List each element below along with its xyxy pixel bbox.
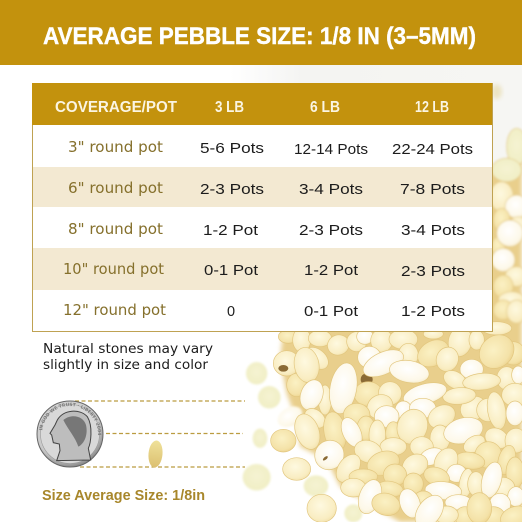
row: 10 inch pot: 10" round pot [63,260,164,278]
table header row: 12 LB [415,99,449,116]
title banner [0,0,522,65]
row: 10 inch pot: 0-1 Pot [204,263,258,279]
row: 10 inch pot: 2-3 Pots [401,264,465,280]
row: 6 inch pot: 2-3 Pots [200,182,264,198]
table header row: 6 LB [310,99,340,116]
table header row [32,83,492,125]
pebble backdrop shadow [280,150,522,522]
table header row: 3 LB [215,99,244,116]
row: 12 inch pot: 0 [227,304,235,320]
row: 6 inch pot [33,167,492,207]
pebble pile [271,322,522,522]
note: natural variation: slightly in size and color [43,357,208,373]
row: 3 inch pot: 3" round pot [68,138,163,156]
caption: average size: Size Average Size: 1/8in [42,488,205,504]
row: 6 inch pot: 3-4 Pots [299,182,363,198]
faint blurred pebble by table corner [491,84,502,99]
row: 8 inch pot [68,220,465,239]
row: 8 inch pot: 1-2 Pot [203,223,258,239]
blurred pebbles upper right [490,128,522,323]
table frame [32,84,492,332]
title text: AVERAGE PEBBLE SIZE: 1/8 IN (3–5MM) [43,23,476,50]
icon: nickel coin [36,400,104,468]
row: 12 inch pot: 1-2 Pots [401,304,465,320]
row: 10 inch pot: 1-2 Pot [304,263,358,279]
row: 8 inch pot: 3-4 Pots [401,223,465,239]
loose blurred pebbles left [243,362,362,522]
photo: scattered pebbles [243,84,522,522]
row: 3 inch pot [68,138,473,158]
row: 3 inch pot: 5-6 Pots [200,141,264,157]
row: 8 inch pot: 8" round pot [68,220,163,238]
row: 12 inch pot: 0-1 Pot [304,304,358,320]
icon: nickel coin: IN GOD WE TRUST · LIBERTY 2004 [39,402,102,436]
coin portrait [50,411,91,461]
row: 12 inch pot: 12" round pot [63,301,166,319]
size guide lines [75,401,245,467]
icon: single pebble [147,440,164,468]
row: 3 inch pot: 22-24 Pots [392,142,473,158]
background photo wash [230,65,522,165]
row: 12 inch pot [63,301,465,320]
coverage table [32,83,492,332]
row: 3 inch pot: 12-14 Pots [294,142,368,158]
note: natural variation [43,341,213,373]
row: 10 inch pot [33,248,492,290]
table header row: COVERAGE/POT [55,99,177,116]
row: 6 inch pot: 6" round pot [68,179,163,197]
note: natural variation: Natural stones may vary [43,341,213,357]
row: 8 inch pot: 2-3 Pots [299,223,363,239]
row: 6 inch pot: 7-8 Pots [400,182,465,198]
